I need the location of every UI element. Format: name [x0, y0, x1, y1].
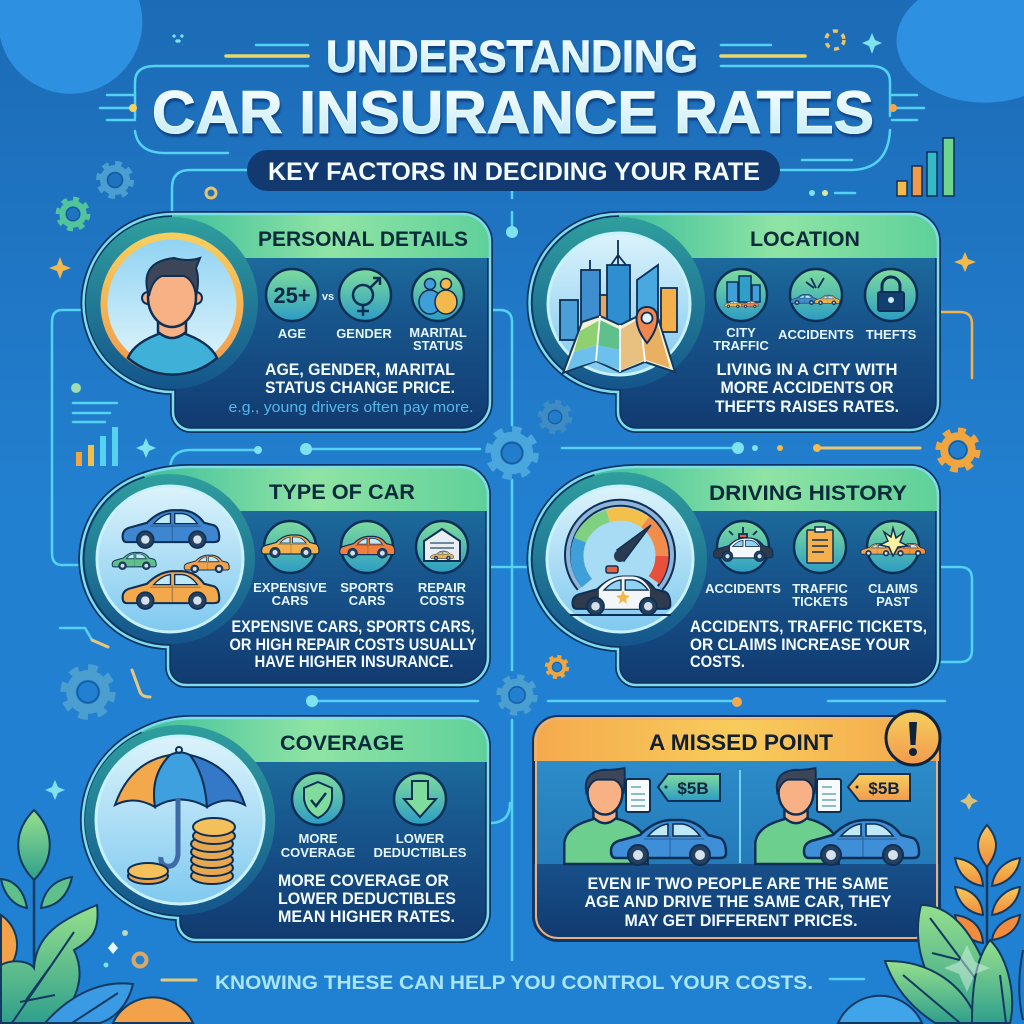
icon labels — [281, 831, 467, 860]
icon labels: MARITAL — [409, 325, 467, 340]
icon labels — [713, 325, 917, 353]
description: OR HIGH REPAIR COSTS USUALLY — [230, 636, 476, 654]
illustration: right person and car — [755, 768, 919, 865]
title: CAR INSURANCE RATES — [152, 79, 874, 146]
icon labels: STATUS — [413, 338, 463, 353]
icon: traffic tickets — [794, 521, 846, 573]
heading: TYPE OF CAR — [269, 481, 415, 504]
icon labels: CARS — [349, 593, 386, 608]
icon: shield check — [292, 773, 344, 825]
icon: group of cars — [112, 510, 229, 609]
icon labels: AGE — [278, 326, 306, 341]
description: e.g., young drivers often pay more. — [228, 399, 474, 416]
icon: umbrella and coins — [115, 747, 245, 884]
icon labels: PAST — [876, 594, 910, 609]
description — [228, 361, 474, 416]
description: MEAN HIGHER RATES. — [278, 908, 455, 926]
description — [584, 875, 892, 930]
description: HAVE HIGHER INSURANCE. — [254, 653, 454, 671]
icon labels: SPORTS — [340, 580, 394, 595]
heading: DRIVING HISTORY — [709, 482, 907, 505]
description: THEFTS RAISES RATES. — [715, 398, 899, 416]
heading: COVERAGE — [280, 732, 404, 755]
icon labels — [253, 580, 467, 608]
description: EVEN IF TWO PEOPLE ARE THE SAME — [588, 875, 888, 893]
illustration: bottom-right leaves — [885, 825, 1023, 1023]
icon labels — [705, 581, 918, 609]
icon: repair costs garage — [416, 521, 468, 573]
icon: age 25+: 25+ — [273, 283, 311, 308]
icon: accidents police car — [714, 521, 773, 573]
panel: a missed point — [534, 711, 940, 940]
footer text: KNOWING THESE CAN HELP YOU CONTROL YOUR COSTS. — [215, 973, 813, 994]
icon labels: TRAFFIC — [713, 338, 769, 353]
icon: sports cars — [340, 521, 395, 573]
divider — [739, 770, 741, 863]
description: OR CLAIMS INCREASE YOUR — [690, 636, 910, 654]
description: LIVING IN A CITY WITH — [716, 361, 898, 379]
heading: A MISSED POINT — [649, 730, 834, 755]
icon: marital status — [412, 269, 464, 321]
icon labels: ACCIDENTS — [778, 327, 854, 342]
description: STATUS CHANGE PRICE. — [265, 379, 455, 397]
illustration: bottom-left leaves — [1, 810, 133, 1023]
icon labels: REPAIR — [418, 580, 467, 595]
icon labels: TICKETS — [792, 594, 848, 609]
description: COSTS. — [690, 653, 745, 671]
icon: down arrow — [394, 773, 446, 825]
description: ACCIDENTS, TRAFFIC TICKETS, — [690, 618, 927, 636]
icon labels: GENDER — [336, 326, 392, 341]
icon: speedometer and police car — [568, 503, 672, 615]
vs label: vs — [322, 291, 334, 303]
description: LOWER DEDUCTIBLES — [278, 890, 456, 908]
icon labels — [278, 325, 467, 353]
panel: type of car — [81, 467, 488, 685]
description: MORE ACCIDENTS OR — [720, 379, 894, 397]
decorative gears — [58, 164, 977, 715]
icon labels: COVERAGE — [281, 845, 356, 860]
description — [278, 872, 456, 926]
icon: exclamation badge — [886, 711, 940, 765]
icon: person avatar — [128, 258, 217, 375]
icon: city traffic — [715, 269, 767, 321]
icon labels: COSTS — [420, 593, 465, 608]
panel: coverage — [83, 718, 488, 940]
icon: claims past crash — [861, 521, 925, 573]
icon: gender — [339, 269, 391, 321]
icon labels: CARS — [272, 593, 309, 608]
icon: age 25+ — [266, 269, 318, 321]
icon labels: LOWER — [396, 831, 445, 846]
icon labels: CLAIMS — [868, 581, 918, 596]
icon labels: TRAFFIC — [792, 581, 848, 596]
icon labels: THEFTS — [866, 327, 917, 342]
heading: PERSONAL DETAILS — [258, 228, 468, 251]
description: AGE AND DRIVE THE SAME CAR, THEY — [584, 893, 892, 911]
icon: city and map — [560, 240, 677, 373]
icon: thefts padlock — [865, 269, 917, 321]
description: MAY GET DIFFERENT PRICES. — [624, 912, 858, 930]
description: EXPENSIVE CARS, SPORTS CARS, — [232, 618, 474, 636]
icon: mini bar chart left — [76, 427, 118, 466]
description — [690, 618, 927, 671]
illustration: left person and car: $5B — [677, 779, 709, 798]
panel: location — [529, 214, 938, 430]
panel: personal details — [83, 214, 490, 430]
description — [230, 618, 476, 671]
icon labels: MORE — [298, 831, 338, 846]
subtitle pill — [247, 150, 780, 191]
description: MORE COVERAGE OR — [278, 872, 449, 890]
icon labels: DEDUCTIBLES — [374, 845, 467, 860]
icon: expensive cars — [262, 521, 319, 573]
title — [152, 31, 874, 146]
description — [715, 361, 899, 416]
title: UNDERSTANDING — [326, 31, 698, 82]
heading: LOCATION — [750, 228, 860, 251]
illustration: right person and car: $5B — [868, 779, 900, 798]
icon: accidents — [790, 269, 842, 321]
icon labels: ACCIDENTS — [705, 581, 781, 596]
icon labels: EXPENSIVE — [253, 580, 327, 595]
illustration: left person and car — [564, 768, 726, 865]
subtitle pill: KEY FACTORS IN DECIDING YOUR RATE — [268, 158, 760, 186]
description: AGE, GENDER, MARITAL — [265, 361, 455, 379]
panel: driving history — [529, 467, 938, 685]
icon labels: CITY — [726, 325, 756, 340]
icon: mini bar chart top right — [897, 138, 954, 196]
